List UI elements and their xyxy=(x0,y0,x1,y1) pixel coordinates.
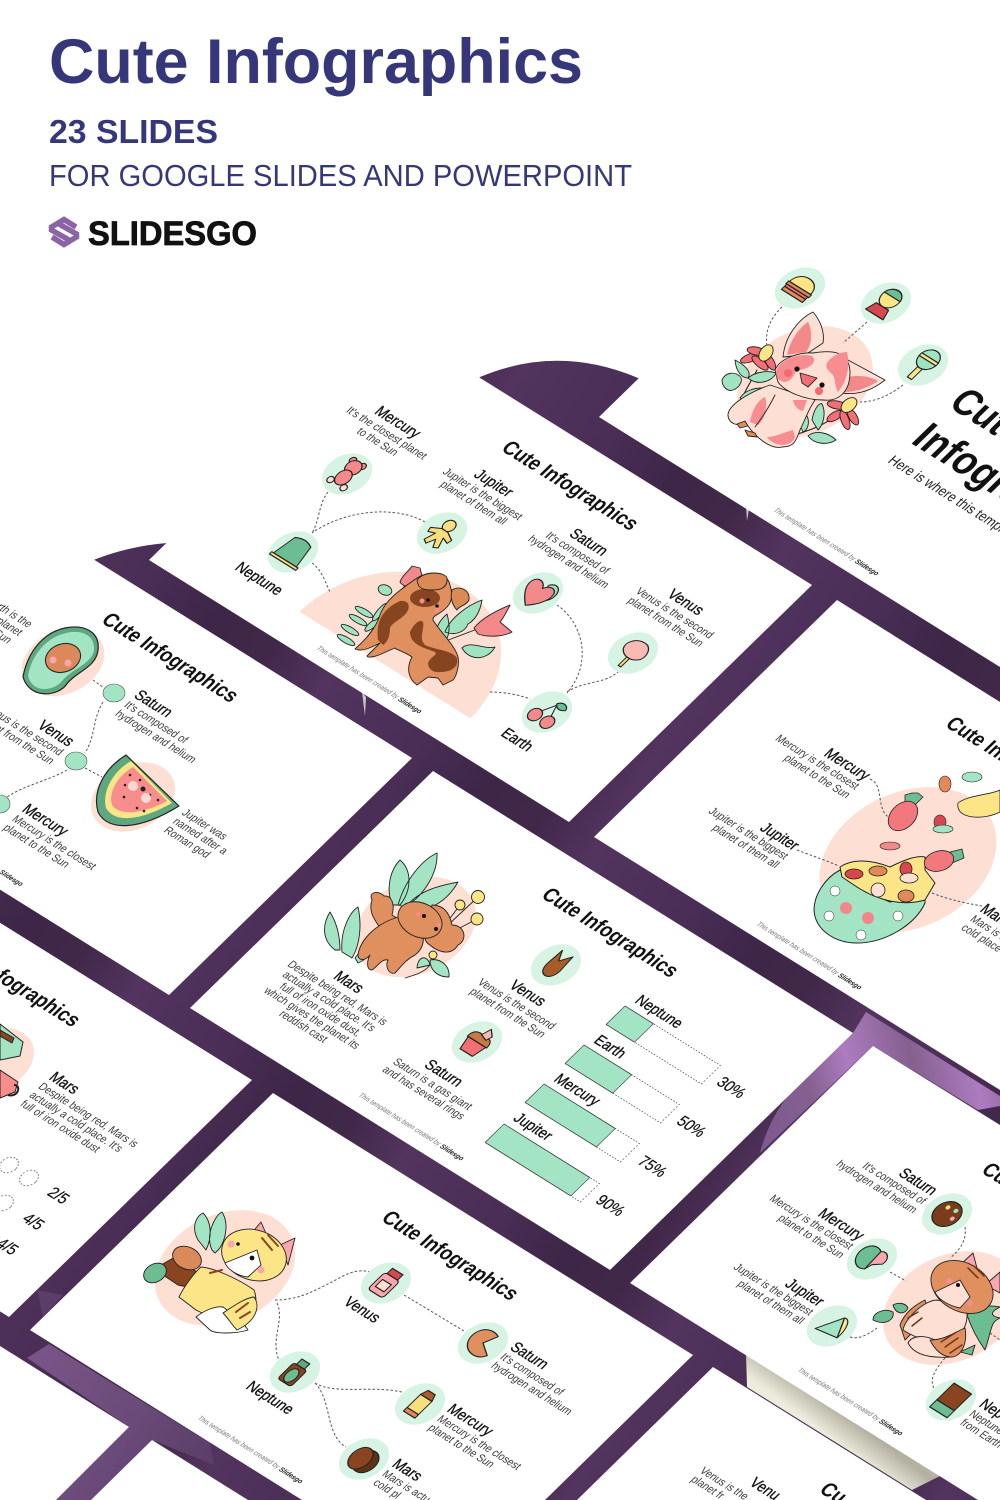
light purple sheen top right xyxy=(760,1012,1000,1153)
text block Saturn: hydrogen and helium xyxy=(112,708,199,766)
bar labels xyxy=(509,992,687,1144)
flowers and ferns xyxy=(336,566,512,658)
text block Mars: actually a cold place. It's xyxy=(279,969,379,1035)
peach blob xyxy=(0,1016,50,1104)
subheading platforms: FOR GOOGLE SLIDES AND POWERPOINT xyxy=(49,158,632,193)
banana xyxy=(958,790,1000,817)
pig peach blob xyxy=(709,305,901,459)
bar labels: Earth xyxy=(590,1032,630,1062)
text block Mercury: Mercury xyxy=(371,403,426,442)
label Neptune: Neptune xyxy=(231,559,287,599)
pig illustration xyxy=(722,312,885,447)
rating circles xyxy=(0,1154,42,1214)
light purple sheen bottom left xyxy=(27,1344,214,1500)
title: Cute Infographics xyxy=(96,609,244,707)
bar labels: Jupiter xyxy=(509,1110,557,1144)
bar Mercury xyxy=(525,1084,639,1162)
icon: rabbit xyxy=(520,937,592,993)
bar Jupiter xyxy=(485,1124,599,1202)
dashed connectors pig xyxy=(766,307,903,402)
credit: This template has been created by Slidesgo xyxy=(315,645,423,715)
text block Mars: full of iron oxide dust xyxy=(17,1098,103,1155)
text block Mercury: Mercury is the closest xyxy=(9,813,99,873)
text block Mercury: Mercury xyxy=(18,801,73,839)
icon: gumball machine xyxy=(850,275,922,331)
text block Jupiter: named after a xyxy=(170,816,231,857)
watermelon peach blob xyxy=(74,749,192,845)
icon: chocolate xyxy=(916,1372,986,1428)
bar percentages: 75% xyxy=(634,1153,671,1181)
icon: cookie xyxy=(912,1186,982,1242)
text block Venus: Venus is the second xyxy=(632,586,716,641)
text block Mercury: planet to the Sun xyxy=(781,753,853,801)
rating values: 2/5 xyxy=(43,1184,73,1208)
text block Mercury: planet to the Sun xyxy=(425,1422,497,1470)
cream sheen band xyxy=(746,1353,942,1490)
text block Mercury: It's the closest planet xyxy=(343,405,430,462)
avocado illustration xyxy=(23,627,98,694)
yellow cat illustration xyxy=(140,1212,295,1333)
text block Mars: actually a cold place. It's xyxy=(26,1090,126,1155)
text block Jupiter: Jupiter xyxy=(781,1275,829,1309)
text block Saturn: Saturn xyxy=(895,1165,942,1198)
text block Venus: planet from the Sun xyxy=(624,595,706,649)
text block Jupiter: Jupiter is the biggest xyxy=(440,466,525,523)
slide: cups and ratings xyxy=(0,818,252,1317)
icon: maraca xyxy=(888,337,958,393)
peach blob xyxy=(329,858,501,996)
text block Jupiter: Jupiter is the biggest xyxy=(705,805,791,862)
timeline nodes xyxy=(0,684,125,813)
dog illustration xyxy=(355,573,469,685)
text block Saturn: It's composed of xyxy=(859,1160,930,1208)
rating values: 4/5 xyxy=(18,1210,48,1234)
logo mark xyxy=(52,220,76,244)
peach half circle xyxy=(300,535,549,718)
avocado peach blob xyxy=(4,615,122,709)
bar percentages: 90% xyxy=(592,1192,629,1220)
text block Jupiter: planet of them all xyxy=(437,479,510,527)
slide: orange cat xyxy=(630,1046,1000,1500)
text block Mercury: Mercury xyxy=(820,745,875,784)
peach blob xyxy=(783,760,1000,960)
text block Saturn: Saturn xyxy=(421,1056,467,1090)
icon: green jar xyxy=(260,1344,330,1400)
dashed connectors xyxy=(7,680,104,797)
text block Mercury: Mercury xyxy=(443,1401,498,1439)
text block Saturn: hydrogen and helium xyxy=(525,533,612,591)
text block Jupiter: Jupiter is the biggest xyxy=(730,1261,816,1318)
slide: dog mind map xyxy=(149,323,812,822)
text block Jupiter: Jupiter xyxy=(470,466,518,500)
text block Mars: Mars xyxy=(45,1069,84,1097)
dashed connectors xyxy=(312,492,620,699)
text block Mercury: planet to the Sun xyxy=(0,822,72,870)
bowl illustration xyxy=(814,857,935,943)
text block Jupiter: Roman god xyxy=(161,825,213,861)
logo wordmark: SLIDESGO xyxy=(88,215,257,253)
purple backdrop behind the slides xyxy=(0,361,1000,1500)
title: Cute Infographics xyxy=(536,884,684,982)
dashed connectors xyxy=(275,1271,464,1447)
slide: yellow cat mind map xyxy=(30,1093,693,1500)
label Earth: Earth xyxy=(497,725,537,755)
text block Mars: Mars xyxy=(330,968,368,996)
credit: This template has been created by Slidesgo xyxy=(796,1367,904,1437)
icon: cupcake xyxy=(442,1014,512,1070)
icon: cotton candy xyxy=(598,625,668,681)
text block Jupiter: Jupiter xyxy=(756,819,804,853)
bar labels: Mercury xyxy=(550,1071,605,1110)
icon: gingerbread xyxy=(406,505,478,561)
text block Saturn: and has several rings xyxy=(379,1064,468,1123)
slide: pig cover xyxy=(599,180,1000,667)
text block Mercury: to the Sun xyxy=(354,426,401,459)
icon: jam jar xyxy=(350,1255,422,1311)
text block Saturn: It's composed of xyxy=(543,530,613,577)
dashed connectors xyxy=(850,1227,1000,1390)
text block Mercury: Mercury is the closest xyxy=(766,1193,856,1252)
cups illustration xyxy=(0,1024,23,1098)
bar labels: Neptune xyxy=(631,992,687,1032)
text block Mercury: Mercury is the closest xyxy=(434,1413,524,1473)
text block Jupiter: Jupiter was xyxy=(179,807,230,843)
peach blob xyxy=(126,1188,324,1348)
peach blob xyxy=(854,1230,1000,1386)
icon: pie xyxy=(448,1315,518,1371)
text block Saturn: hydrogen and helium xyxy=(833,1158,920,1216)
strawberries xyxy=(882,793,964,875)
title: Cute Infographics xyxy=(496,437,644,535)
text block Venus: Venus xyxy=(506,977,550,1009)
bar Neptune xyxy=(606,1006,720,1084)
slide: bottom left white xyxy=(91,1440,248,1500)
text block Saturn: hydrogen and helium xyxy=(488,1360,575,1418)
slide: bars and puppy xyxy=(190,771,853,1270)
heading: Cute Infographics xyxy=(49,27,583,97)
text block Mars: Mars xyxy=(388,1456,427,1484)
text block Venus: Venus xyxy=(34,717,79,749)
text block Saturn: Saturn xyxy=(566,525,612,559)
bar percentages: 30% xyxy=(713,1074,750,1102)
subheading slides count: 23 SLIDES xyxy=(49,113,218,150)
text block Mercury: Mercury is the closest xyxy=(772,733,862,792)
icon: nut xyxy=(328,1431,400,1487)
orange cat illustration xyxy=(873,1250,1000,1357)
text block Mercury: planet to the Sun xyxy=(775,1213,847,1261)
text block Saturn: It's composed of xyxy=(121,699,191,747)
text block Mars: reddish cast xyxy=(276,1008,330,1045)
credit: This template has been created by Slidesgo xyxy=(755,921,863,991)
icon: gummy bear xyxy=(312,446,382,502)
paper sliver highlights xyxy=(362,506,749,716)
text block Saturn: Saturn is a gas giant xyxy=(390,1056,475,1113)
text block Mercury: Mercury xyxy=(814,1205,869,1244)
text block Venus: planet from the Sun xyxy=(466,986,548,1040)
label Venus: Venus xyxy=(340,1294,384,1326)
icon: bottle xyxy=(384,1376,456,1432)
text block Jupiter: planet of them all xyxy=(734,1278,807,1327)
slide: lower left white xyxy=(0,1346,129,1500)
icon: heart xyxy=(502,565,574,621)
dashed connectors xyxy=(797,779,982,906)
slide: bottom right xyxy=(577,1367,926,1500)
icon: burger xyxy=(764,260,836,316)
text block Mars: full of iron oxide dust, xyxy=(276,981,364,1039)
credit: This template has been created by Slidesgo xyxy=(357,1092,465,1162)
icon: crepe xyxy=(796,1298,868,1354)
credit: This template has been created by Slidesgo xyxy=(196,1415,304,1485)
slide: bowl of cereal xyxy=(594,600,1000,1090)
bar Earth xyxy=(565,1045,679,1123)
text block Saturn: Saturn xyxy=(506,1339,553,1372)
icon: croissant xyxy=(836,1231,908,1287)
text block Mars: which gives the planet its xyxy=(260,985,363,1052)
cereal rings xyxy=(880,772,982,850)
text block Jupiter: planet of them all xyxy=(709,822,782,871)
bar percentages: 50% xyxy=(673,1113,710,1141)
title: Cute Infographics xyxy=(376,1207,524,1305)
rating values xyxy=(0,1184,73,1259)
bar percentages xyxy=(592,1074,750,1220)
label Neptune: Neptune xyxy=(242,1378,298,1418)
small highlight facet xyxy=(37,1290,63,1317)
text block Saturn: Saturn xyxy=(130,687,177,720)
text block Venus: Venus xyxy=(664,586,708,618)
icon: cherries xyxy=(512,684,582,740)
puppy illustration xyxy=(325,853,484,978)
text block Mars: Despite being red, Mars is xyxy=(35,1081,141,1150)
text block Saturn: It's composed of xyxy=(497,1351,567,1399)
icon: jelly xyxy=(258,524,328,580)
text block Mars: Despite being red, Mars is xyxy=(284,959,391,1028)
watermelon illustration xyxy=(97,755,179,826)
slide: avocado and watermelon xyxy=(0,496,412,995)
text block Venus: Venus is the second xyxy=(474,977,558,1032)
credit: This template has been created by Slidesgo xyxy=(772,507,880,577)
